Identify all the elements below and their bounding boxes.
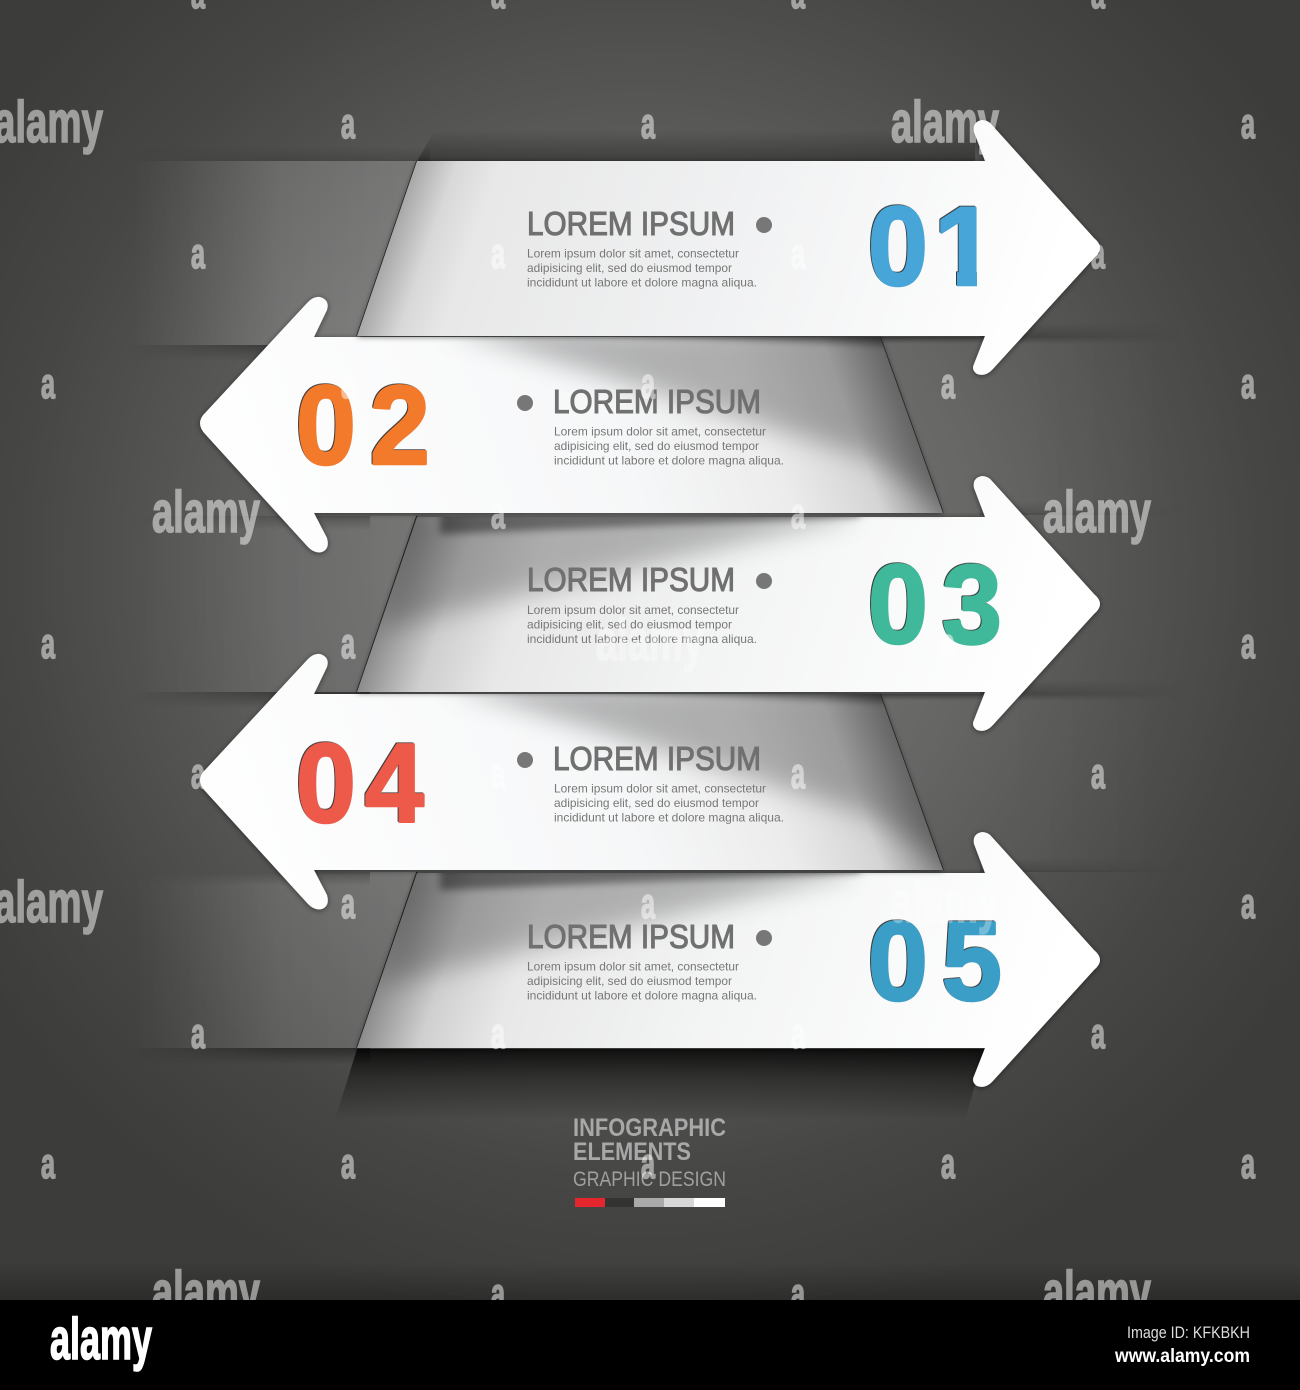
watermark pattern: alamy <box>1043 480 1151 545</box>
watermark pattern: a <box>491 230 506 278</box>
watermark pattern: alamy <box>596 608 704 673</box>
body text 04: adipisicing elit, sed do eiusmod tempor <box>554 796 759 810</box>
body text 02: Lorem ipsum dolor sit amet, consectetur <box>554 424 766 438</box>
watermark pattern: a <box>491 1270 506 1318</box>
watermark pattern: a <box>791 490 806 538</box>
body text 01: adipisicing elit, sed do eiusmod tempor <box>527 261 732 275</box>
watermark pattern: a <box>41 620 56 668</box>
body text 05: adipisicing elit, sed do eiusmod tempor <box>527 974 732 988</box>
number 04: 0 <box>296 721 356 846</box>
watermark pattern: alamy <box>152 1260 260 1325</box>
arrow 01 <box>357 120 1100 375</box>
watermark pattern: a <box>1241 100 1256 148</box>
watermark pattern: a <box>341 360 356 408</box>
body text 05: incididunt ut labore et dolore magna aliqua. <box>527 988 757 1002</box>
number 02: 0 <box>296 363 356 488</box>
watermark pattern: a <box>1091 230 1106 278</box>
number 04: 4 <box>365 721 424 846</box>
number 02 <box>296 363 430 488</box>
watermark pattern: a <box>1091 750 1106 798</box>
number 01 <box>870 204 977 288</box>
heading 03: LOREM IPSUM <box>527 561 735 598</box>
body text 04 <box>554 782 784 824</box>
watermark pattern: alamy <box>1043 1260 1151 1325</box>
title line: infographic: INFOGRAPHIC <box>573 1114 726 1142</box>
watermark pattern: a <box>491 1010 506 1058</box>
arrow 04 <box>200 654 965 909</box>
body text 02: incididunt ut labore et dolore magna aliqua. <box>554 454 784 468</box>
body text 03: Lorem ipsum dolor sit amet, consectetur <box>527 603 739 617</box>
heading 01: LOREM IPSUM <box>527 205 735 242</box>
body text 01 <box>527 246 757 290</box>
number 05: 5 <box>942 899 1002 1024</box>
number 03 <box>868 542 1002 667</box>
body text 01: Lorem ipsum dolor sit amet, consectetur <box>527 246 739 260</box>
watermark pattern: a <box>941 620 956 668</box>
watermark pattern: alamy <box>891 90 999 155</box>
watermark pattern: a <box>641 1140 656 1188</box>
watermark pattern: a <box>341 620 356 668</box>
arrow 05 <box>357 832 1100 1087</box>
heading 02: LOREM IPSUM <box>553 383 761 420</box>
subtitle: graphic design: GRAPHIC DESIGN <box>573 1168 726 1191</box>
watermark pattern: a <box>41 1140 56 1188</box>
body text 05 <box>527 960 757 1002</box>
black footer bar <box>0 1300 1300 1390</box>
body text 03: incididunt ut labore et dolore magna aliqua. <box>527 632 757 646</box>
footer title block <box>573 1114 726 1207</box>
watermark pattern: a <box>41 360 56 408</box>
watermark pattern: a <box>1241 1140 1256 1188</box>
watermark pattern: a <box>1241 620 1256 668</box>
body text 03 <box>527 603 757 646</box>
heading 05: LOREM IPSUM <box>527 918 735 955</box>
watermark pattern: alamy <box>152 480 260 545</box>
arrow 03 <box>357 476 1100 731</box>
alamy logo: alamy <box>50 1307 152 1372</box>
number 01: 1 <box>934 184 996 309</box>
body text 04: incididunt ut labore et dolore magna aliqua. <box>554 810 784 824</box>
watermark pattern: a <box>341 880 356 928</box>
number 03: 3 <box>942 542 1002 667</box>
body text 02: adipisicing elit, sed do eiusmod tempor <box>554 439 759 453</box>
watermark pattern: a <box>641 100 656 148</box>
watermark pattern: a <box>791 750 806 798</box>
watermark pattern: a <box>791 1270 806 1318</box>
arrow 02 <box>200 297 965 552</box>
watermark pattern: a <box>791 230 806 278</box>
watermark pattern: a <box>941 360 956 408</box>
watermark pattern: a <box>1241 360 1256 408</box>
number 01: 0 <box>868 184 928 309</box>
watermark pattern: a <box>1241 880 1256 928</box>
watermark pattern: a <box>641 360 656 408</box>
watermark pattern: a <box>491 750 506 798</box>
number 04 <box>296 721 424 846</box>
bullet 03 <box>756 573 772 589</box>
watermark pattern: a <box>641 880 656 928</box>
image id: Image ID: KFKBKH <box>1127 1323 1250 1342</box>
watermark pattern: alamy <box>891 870 999 935</box>
body text 02 <box>554 424 784 468</box>
body text 03: adipisicing elit, sed do eiusmod tempor <box>527 618 732 632</box>
bullet 04 <box>517 752 533 768</box>
watermark pattern: a <box>1091 1010 1106 1058</box>
watermark pattern: a <box>341 100 356 148</box>
watermark pattern: a <box>191 750 206 798</box>
watermark pattern: a <box>491 490 506 538</box>
title line: elements: ELEMENTS <box>573 1138 691 1166</box>
watermark pattern: a <box>791 1010 806 1058</box>
body text 05: Lorem ipsum dolor sit amet, consectetur <box>527 960 739 974</box>
body text 01: incididunt ut labore et dolore magna aliqua. <box>527 276 757 290</box>
bullet 01 <box>756 217 772 233</box>
bullet 02 <box>517 395 533 411</box>
watermark pattern: a <box>941 1140 956 1188</box>
body text 04: Lorem ipsum dolor sit amet, consectetur <box>554 782 766 796</box>
number 02: 2 <box>370 363 430 488</box>
watermark pattern: a <box>191 230 206 278</box>
watermark pattern: a <box>341 1140 356 1188</box>
heading 04: LOREM IPSUM <box>553 740 761 777</box>
number 03: 0 <box>868 542 928 667</box>
watermark pattern: a <box>191 1010 206 1058</box>
colour swatch bar <box>575 1198 725 1207</box>
bullet 05 <box>756 930 772 946</box>
number 05 <box>868 899 1002 1024</box>
number 05: 0 <box>868 899 928 1024</box>
site url: www.alamy.com <box>1114 1346 1250 1367</box>
